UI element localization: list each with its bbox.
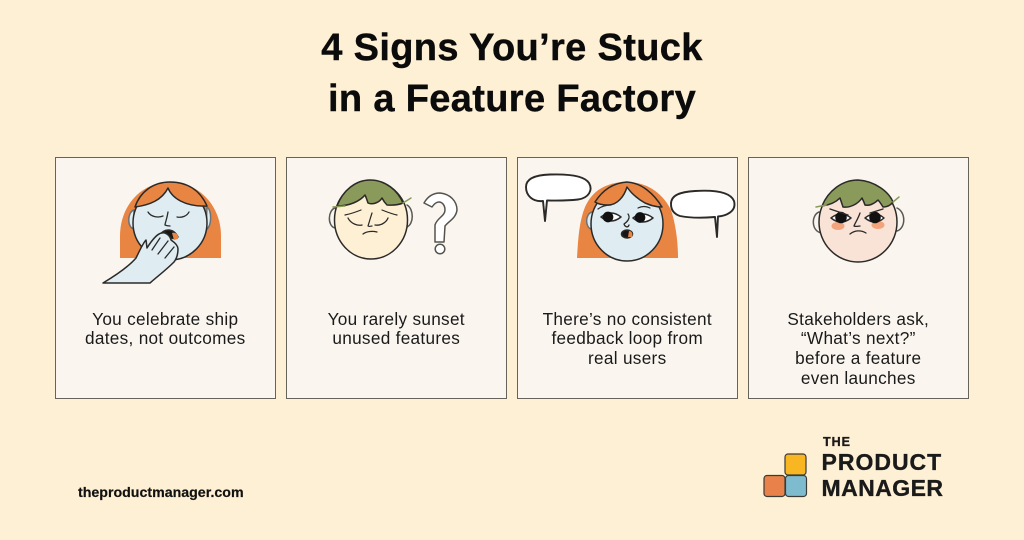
icon: sad man with question mark: [328, 179, 458, 260]
caption: [787, 308, 929, 388]
icon: angry man: [812, 179, 904, 263]
caption: [328, 308, 465, 348]
speech bubble right: [670, 190, 734, 236]
panel: stakeholders ask: [748, 157, 968, 398]
panel: celebrate ship dates: [55, 157, 276, 398]
caption: real users: [588, 348, 666, 368]
website url: theproductmanager.com: [78, 485, 244, 501]
title: in a Feature Factory: [328, 78, 696, 120]
speech bubble left: [526, 174, 590, 220]
caption: You celebrate ship: [92, 308, 238, 328]
icon: yawning woman: [102, 181, 221, 284]
question mark: [424, 192, 456, 242]
caption: [543, 308, 712, 368]
logo wordmark: [822, 435, 943, 501]
title: 4 Signs You’re Stuck: [321, 27, 703, 69]
caption: before a feature: [795, 348, 921, 368]
caption: [85, 308, 245, 348]
caption: feedback loop from: [551, 328, 703, 348]
panel: no feedback loop: [517, 157, 738, 398]
logo: [763, 435, 943, 501]
icon: talking woman with speech bubbles: [525, 174, 736, 262]
caption: You rarely sunset: [328, 308, 465, 328]
logo wordmark: PRODUCT: [822, 449, 942, 475]
caption: There’s no consistent: [543, 308, 712, 328]
title: [321, 27, 703, 120]
caption: “What’s next?”: [801, 328, 916, 348]
logo wordmark: THE: [823, 435, 851, 449]
caption: even launches: [801, 368, 916, 388]
caption: Stakeholders ask,: [787, 308, 929, 328]
logo wordmark: MANAGER: [822, 475, 943, 501]
logo blocks: [763, 453, 808, 498]
caption: dates, not outcomes: [85, 328, 245, 348]
caption: unused features: [332, 328, 460, 348]
panel: rarely sunset features: [286, 157, 506, 398]
